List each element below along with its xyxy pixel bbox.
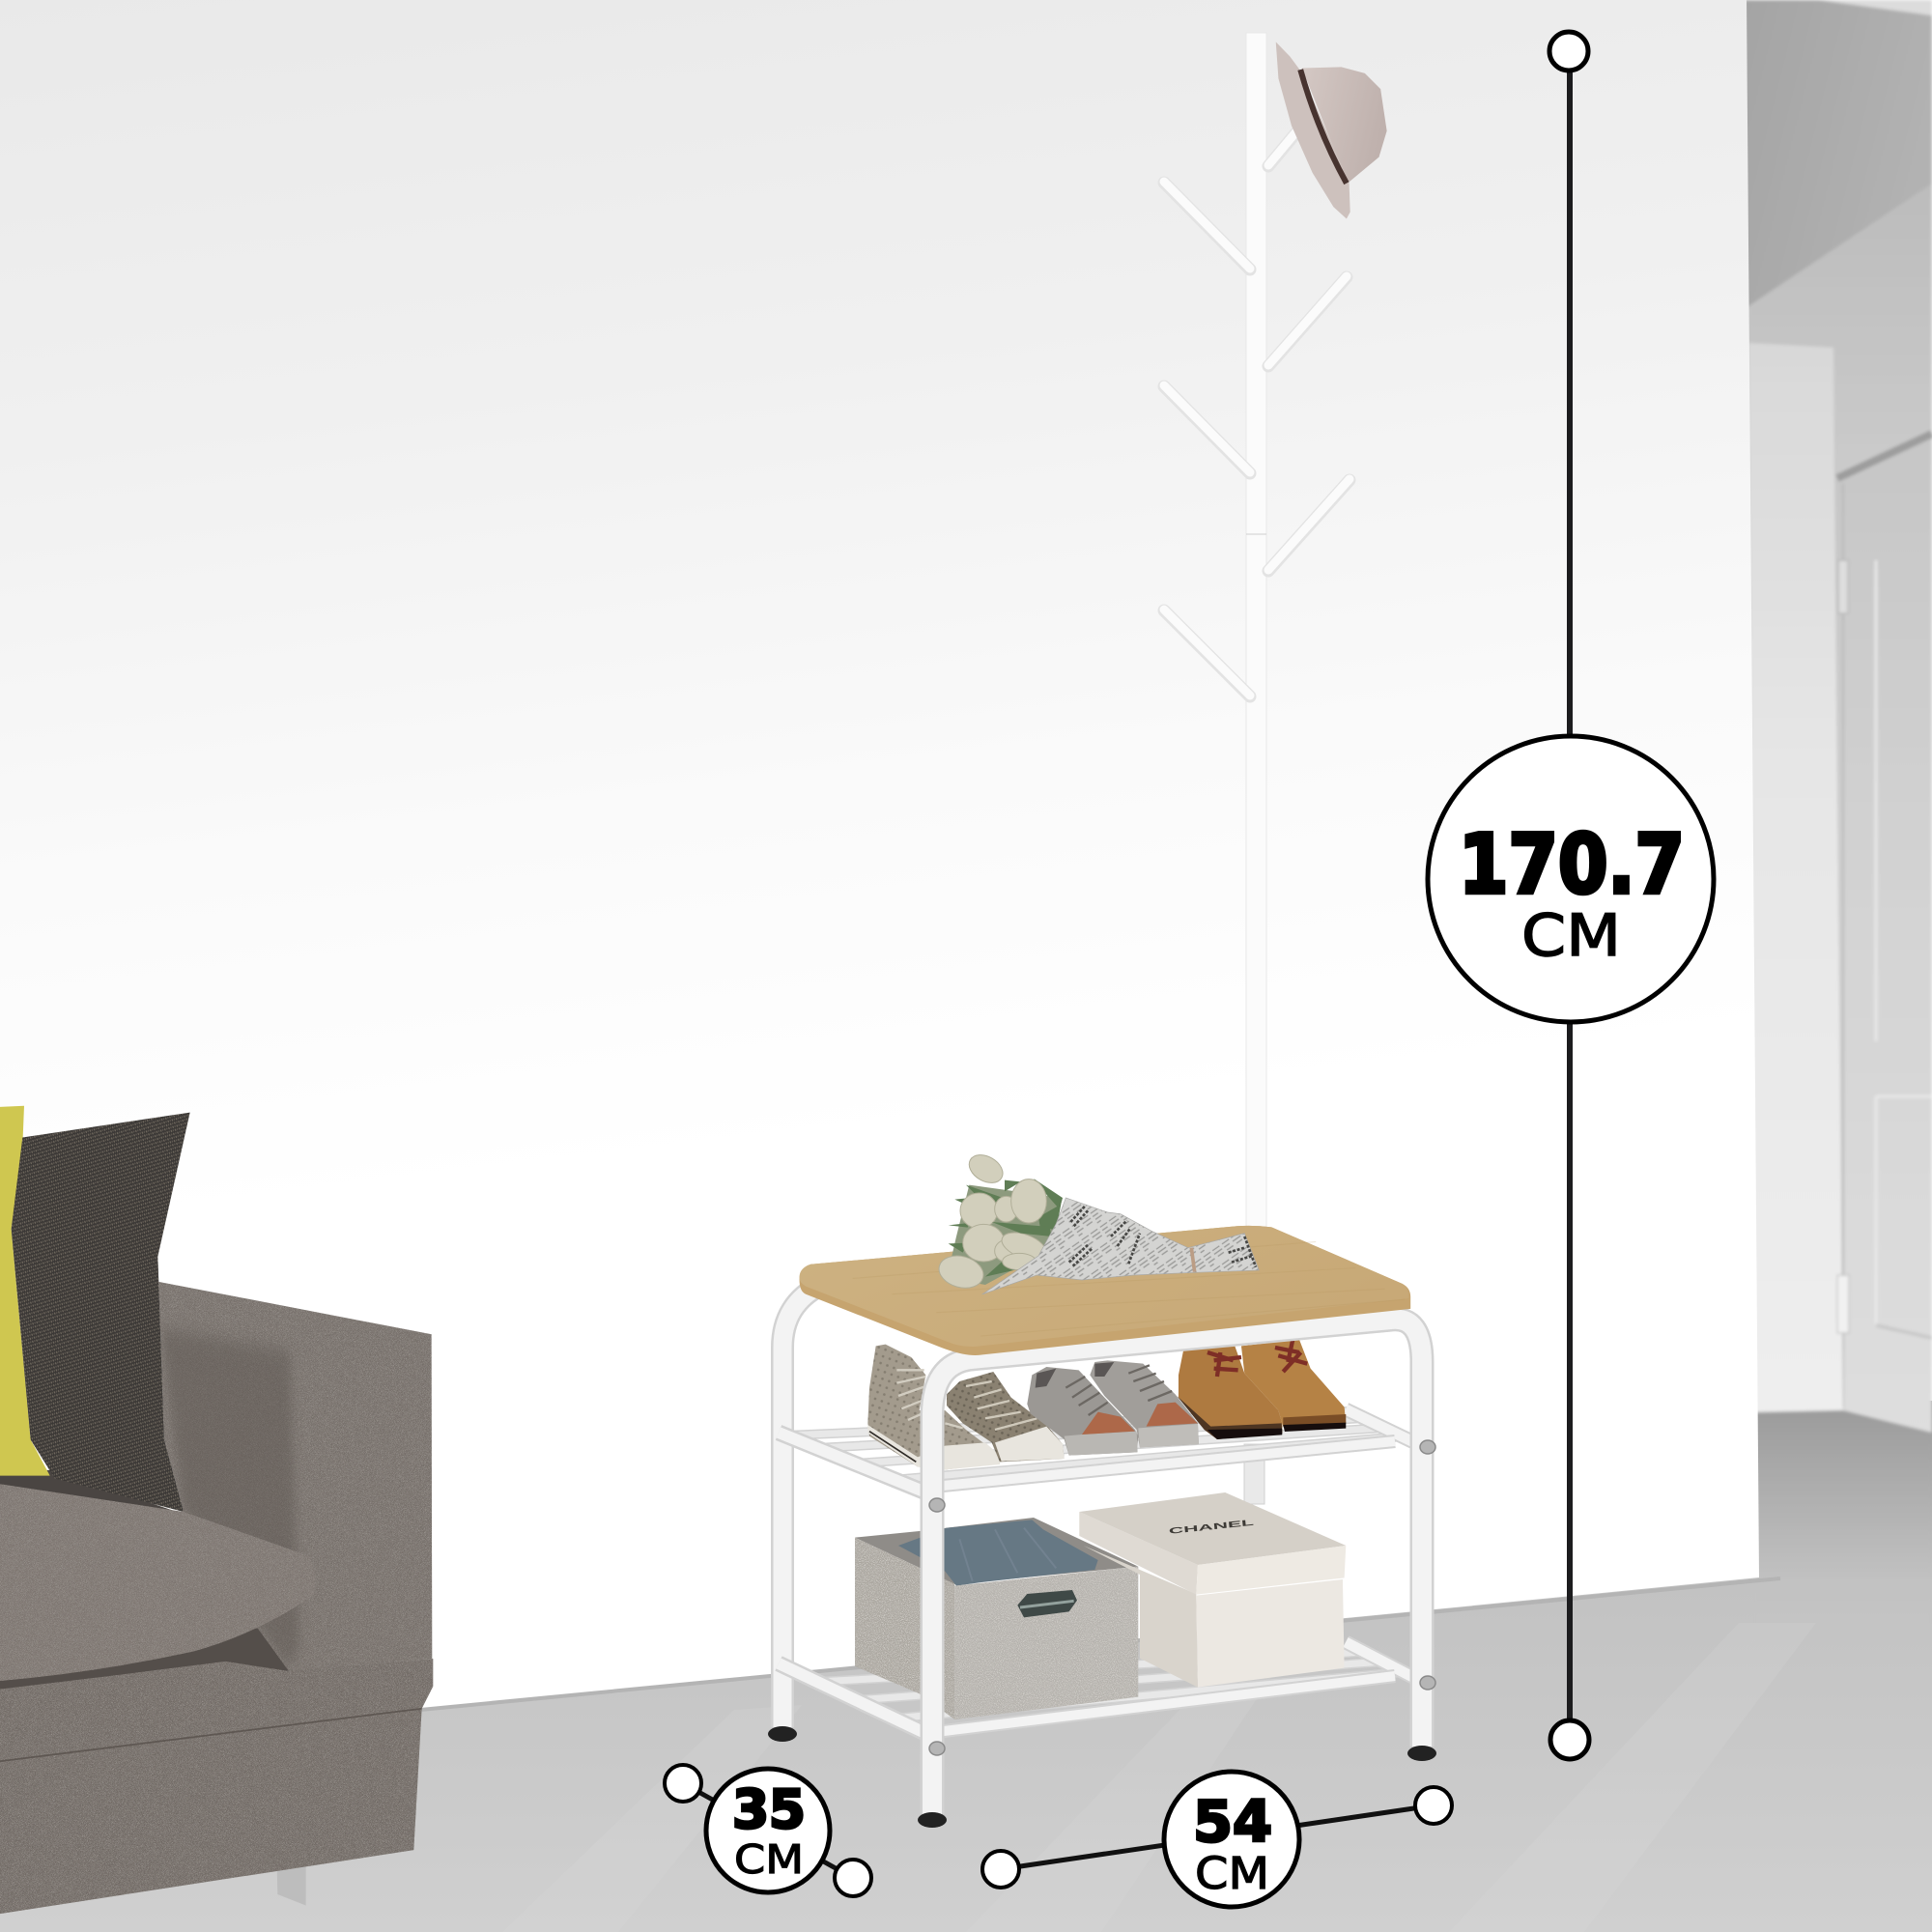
- wooden bench top: [800, 1226, 1410, 1355]
- twine: [1191, 1248, 1195, 1272]
- board edge: [800, 1226, 1410, 1355]
- height badge: 170.7: [1459, 817, 1685, 913]
- basket interior: [855, 1518, 1138, 1584]
- hat branch: [1268, 125, 1302, 166]
- newspaper wrap: [982, 1198, 1259, 1294]
- middle back wall: [1748, 184, 1932, 478]
- height line: [1567, 51, 1573, 1761]
- front left foot: [918, 1812, 947, 1828]
- clothes folds: [959, 1528, 1056, 1581]
- back wall base: [1739, 0, 1932, 1430]
- top marker: [1549, 32, 1588, 71]
- ceiling: [1819, 0, 1932, 15]
- pillar: [1748, 343, 1843, 1412]
- height badge: CM: [1521, 902, 1621, 970]
- sofa base band: [0, 1659, 433, 1761]
- back left foot: [768, 1726, 797, 1742]
- upper left side rail: [779, 1433, 933, 1495]
- depth line: [683, 1783, 853, 1878]
- tulips: [935, 1150, 1050, 1293]
- lower left side rail: [779, 1663, 933, 1737]
- board surface: [800, 1226, 1408, 1347]
- upper front rail: [943, 1441, 1395, 1486]
- pole seam: [1246, 533, 1266, 535]
- dark pillow: [12, 1113, 190, 1512]
- felt basket: [855, 1518, 1138, 1719]
- depth dimension: [665, 1765, 871, 1896]
- basket front face: [954, 1567, 1138, 1719]
- grey sneaker: [1027, 1367, 1138, 1456]
- upper shelf slats: [786, 1411, 1403, 1480]
- lower shelf slats: [817, 1652, 1403, 1719]
- pole: [1246, 33, 1266, 1231]
- width marker right: [1415, 1787, 1452, 1824]
- right foot: [1407, 1746, 1436, 1761]
- bolts: [929, 1440, 1435, 1755]
- sofa leg: [277, 1861, 306, 1905]
- front leg, top rail and right leg: [932, 1320, 1422, 1814]
- brown boot: [1177, 1346, 1282, 1439]
- lower shelf boxes: [855, 1492, 1346, 1719]
- wood grain: [853, 1242, 1405, 1336]
- branch left 1: [1164, 182, 1250, 270]
- pillow shadow: [0, 1470, 185, 1562]
- box lid top: [1079, 1492, 1346, 1565]
- depth badge: 35: [732, 1778, 806, 1840]
- basket handle: [1017, 1590, 1077, 1617]
- box body left: [1084, 1546, 1198, 1688]
- bouquet leaves: [949, 1179, 1063, 1277]
- width marker left: [982, 1851, 1019, 1888]
- brown boot pair: [1241, 1340, 1346, 1432]
- sofa backing shadow: [0, 1628, 290, 1691]
- lower front rail: [944, 1676, 1395, 1731]
- lower pole segment: [1244, 1444, 1264, 1504]
- width line: [1001, 1805, 1434, 1869]
- sofa arm inner shade: [161, 1329, 299, 1667]
- white shoe box: [1079, 1492, 1346, 1688]
- high-top sneaker: [867, 1345, 1000, 1470]
- box brand text: CHANEL: [1168, 1518, 1256, 1536]
- box body front: [1196, 1579, 1345, 1688]
- door hinge: [1837, 1275, 1849, 1333]
- height badge: [1428, 736, 1714, 1022]
- basket left face: [855, 1538, 954, 1719]
- height dimension: [1428, 32, 1714, 1761]
- bouquet backing: [947, 1185, 1063, 1285]
- hat band: [1300, 70, 1347, 184]
- depth badge: CM: [734, 1836, 804, 1883]
- yellow pillow: [0, 1106, 50, 1476]
- floor: [0, 1401, 1932, 1932]
- back left leg: [782, 1285, 821, 1727]
- width dimension: [982, 1772, 1452, 1907]
- bottom marker: [1550, 1720, 1589, 1759]
- front leaf: [992, 1222, 1051, 1236]
- bench back frame: [768, 1285, 1422, 1742]
- back floor: [1753, 1410, 1932, 1642]
- side rails right: [1346, 1409, 1422, 1682]
- bench front frame: [779, 1320, 1436, 1828]
- hat crown: [1302, 67, 1387, 184]
- low sneaker: [947, 1372, 1065, 1462]
- hat: [1276, 42, 1387, 219]
- upper back wall: [1745, 0, 1932, 306]
- branch right 1: [1268, 276, 1347, 366]
- back room: [1739, 0, 1932, 1642]
- door: [1837, 434, 1932, 1433]
- branch right 2: [1268, 479, 1350, 571]
- depth badge: [706, 1769, 830, 1892]
- box lid left: [1079, 1512, 1198, 1595]
- width badge: CM: [1195, 1848, 1269, 1899]
- floor plank streaks: [502, 1623, 1816, 1932]
- branch left 2: [1164, 385, 1250, 473]
- skirting shadow: [0, 1578, 1780, 1750]
- grey sneaker pair: [1090, 1360, 1199, 1447]
- width badge: 54: [1193, 1788, 1272, 1855]
- sofa: [0, 1106, 433, 1914]
- branch left 3: [1164, 610, 1250, 696]
- base seam: [0, 1709, 422, 1761]
- sofa lower base: [0, 1709, 422, 1914]
- coat rack pole: [1164, 33, 1350, 1504]
- box lid front: [1196, 1546, 1346, 1595]
- shoes: [867, 1340, 1346, 1470]
- sofa arm: [157, 1257, 432, 1671]
- folded clothes: [898, 1520, 1098, 1586]
- width badge: [1164, 1772, 1299, 1907]
- newsprint blocks: [1069, 1206, 1256, 1267]
- hat brim: [1276, 42, 1350, 219]
- depth marker back: [665, 1765, 701, 1802]
- bouquet: [935, 1150, 1259, 1294]
- depth marker front: [835, 1860, 871, 1896]
- seat cushion: [0, 1484, 316, 1681]
